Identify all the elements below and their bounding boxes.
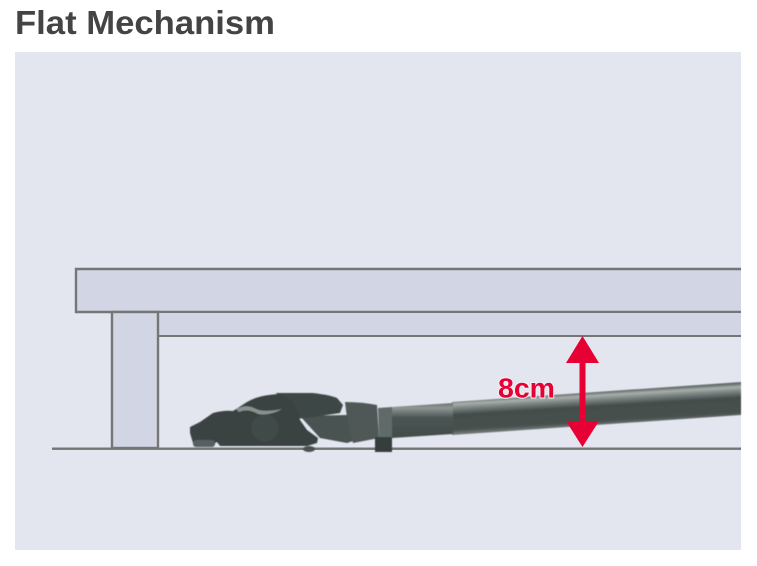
vacuum head body bbox=[190, 394, 318, 446]
vacuum rear foot bbox=[303, 446, 315, 452]
floor line bbox=[52, 448, 741, 450]
height arrow bbox=[566, 336, 599, 447]
vacuum connector bbox=[300, 415, 356, 443]
title: Flat Mechanism bbox=[15, 4, 275, 41]
vacuum wand tube bbox=[452, 382, 741, 435]
arrow head down bbox=[566, 421, 599, 447]
height label: 8cm bbox=[498, 372, 555, 404]
vacuum wand lower section bbox=[392, 403, 453, 438]
arrow shaft bbox=[580, 360, 586, 425]
furniture: apron under table bbox=[158, 312, 741, 336]
vacuum wheel bbox=[252, 414, 278, 442]
vacuum front roller bbox=[193, 440, 215, 447]
vacuum joint collar bbox=[378, 407, 392, 438]
vacuum head top cover bbox=[276, 393, 343, 419]
furniture: table leg bbox=[112, 312, 158, 448]
arrow head up bbox=[566, 336, 599, 363]
vacuum clip bbox=[375, 437, 392, 452]
vacuum neck joint bbox=[345, 402, 379, 443]
vacuum head highlight bbox=[236, 406, 282, 414]
furniture: table top bbox=[76, 269, 741, 312]
vacuum cleaner bbox=[190, 382, 741, 452]
